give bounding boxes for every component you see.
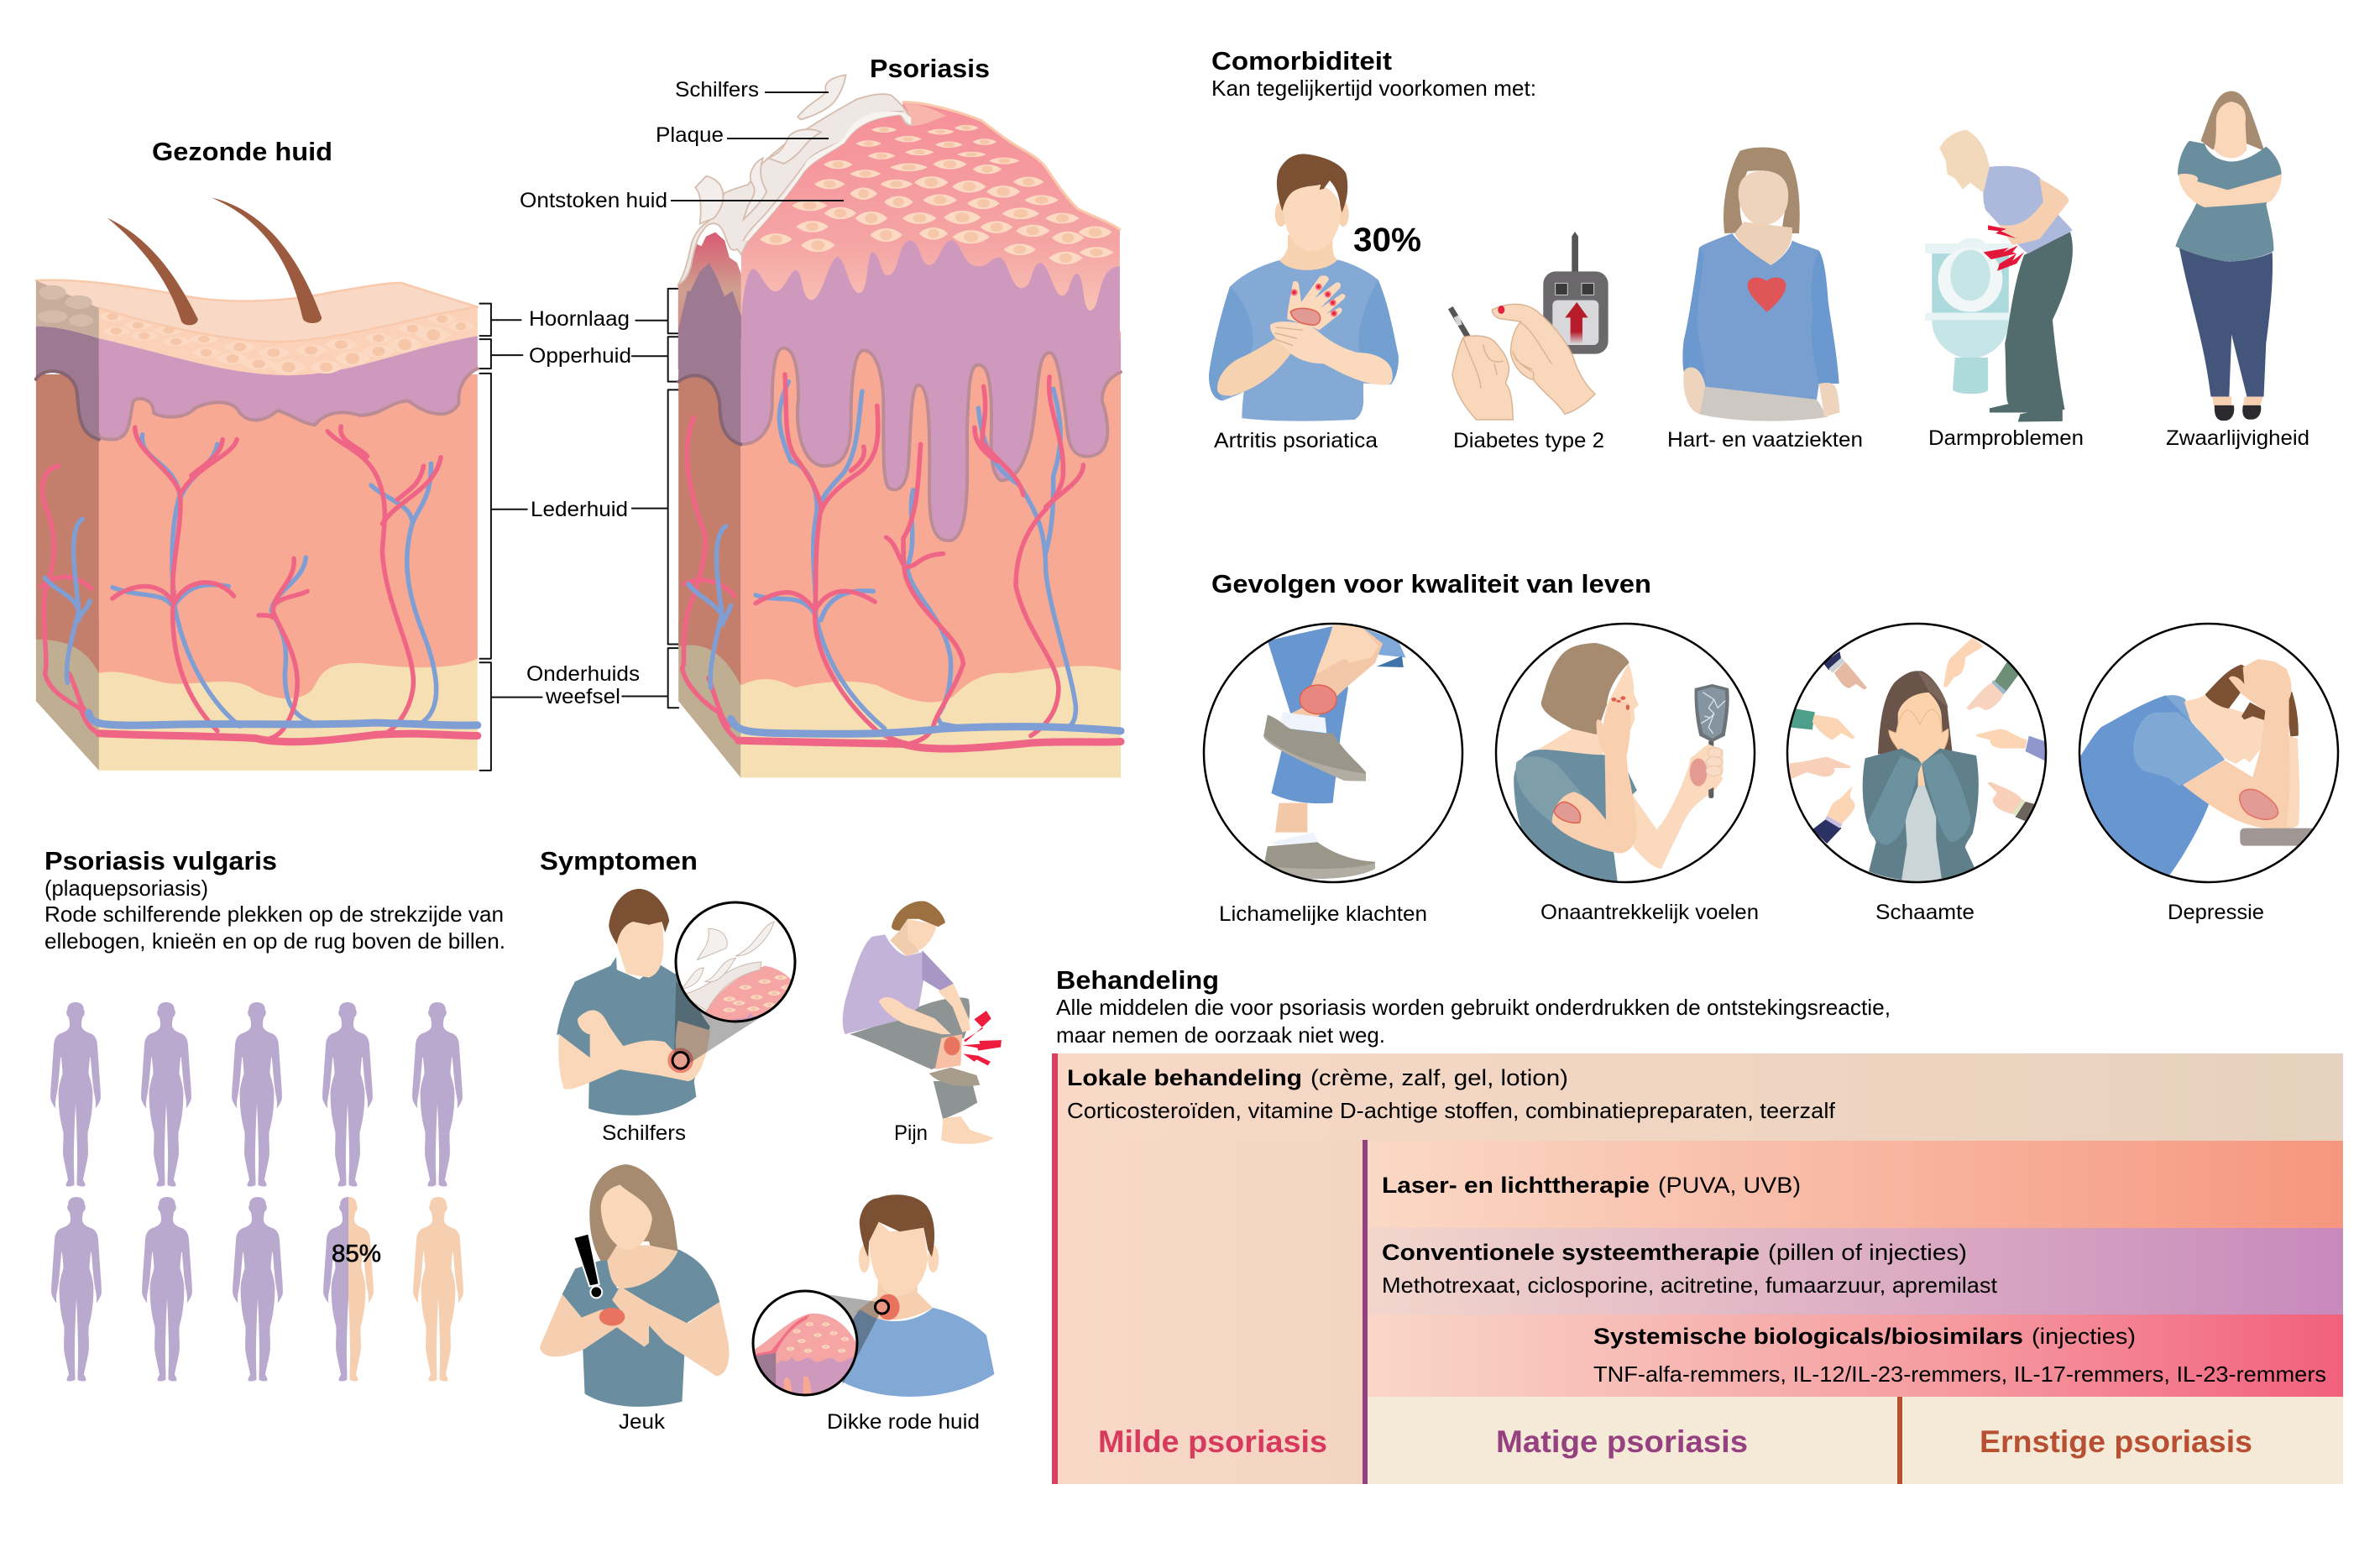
row: Conventionele systeemtherapie xyxy=(1368,1228,2343,1314)
panel: psoriasis skin cross-section xyxy=(520,54,1121,777)
label: weefsel: weefsel xyxy=(545,685,620,708)
severity bar: mild xyxy=(1052,1053,1058,1484)
label: Matige psoriasis: Matige psoriasis xyxy=(1496,1424,1748,1459)
label: Ernstige psoriasis: Ernstige psoriasis xyxy=(1980,1424,2252,1459)
illustration: woman scratching xyxy=(540,1164,730,1434)
panel: Symptomen xyxy=(540,846,1002,1434)
row: Laser- en lichttherapie: (PUVA, UVB) xyxy=(1658,1173,1801,1198)
row: Laser- en lichttherapie xyxy=(1368,1141,2343,1228)
severity band background xyxy=(1368,1397,2343,1484)
label: Ontstoken huid: Ontstoken huid xyxy=(520,189,667,212)
label: Milde psoriasis: Milde psoriasis xyxy=(1098,1424,1327,1459)
label: Pijn xyxy=(894,1121,928,1145)
text block: maar nemen de oorzaak niet weg. xyxy=(1056,1022,1385,1048)
row: Conventionele systeemtherapie: Methotrexaat, ciclosporine, acitretine, fumaarzuur, apremilast xyxy=(1382,1273,1998,1298)
brackets and leader lines xyxy=(480,289,678,771)
heading: Psoriasis: Psoriasis xyxy=(870,54,990,83)
illustration: man with flakes on arm xyxy=(557,889,797,1145)
subtitle: Kan tegelijkertijd voorkomen met: xyxy=(1211,76,1536,101)
label: Artritis psoriatica xyxy=(1214,429,1378,452)
severity bar: moderate xyxy=(1363,1140,1368,1484)
text block: (plaquepsoriasis) xyxy=(44,875,208,901)
text block xyxy=(1056,995,1891,1048)
row: Lokale behandeling: Corticosteroïden, vitamine D-achtige stoffen, combinatiepreparaten, teerzalf xyxy=(1067,1098,1836,1123)
label: Opperhuid: Opperhuid xyxy=(529,344,631,368)
label: Schilfers xyxy=(602,1121,686,1145)
illustration: woman with heart xyxy=(1667,148,1863,452)
row: Lokale behandeling xyxy=(1052,1053,2343,1141)
illustration: man with thick red skin on neck xyxy=(752,1194,994,1434)
row: Conventionele systeemtherapie: Conventionele systeemtherapie xyxy=(1382,1240,1760,1265)
text block: ellebogen, knieën en op de rug boven de billen. xyxy=(44,928,505,954)
severity bar: severe xyxy=(1897,1397,1902,1484)
heading: Comorbiditeit xyxy=(1211,46,1392,76)
illustration: healthy skin block xyxy=(36,197,478,771)
label: Schaamte xyxy=(1875,901,1975,924)
row: Systemische biologicals: Systemische biologicals/biosimilars xyxy=(1593,1324,2023,1349)
illustration: psoriatic skin block xyxy=(678,75,1121,777)
row: Systemische biologicals: TNF-alfa-remmers, IL-12/IL-23-remmers, IL-17-remmers, IL-23-remmers xyxy=(1593,1361,2326,1387)
heading: Symptomen xyxy=(540,846,698,875)
label: Onderhuids: Onderhuids xyxy=(526,662,640,686)
label: Plaque: Plaque xyxy=(656,123,724,147)
row: Systemische biologicals xyxy=(1368,1314,2343,1397)
label: Jeuk xyxy=(619,1410,666,1434)
illustration: diabetes meter xyxy=(1448,232,1608,452)
illustration: overweight woman xyxy=(2166,91,2309,450)
stat: 30%: 30% xyxy=(1353,222,1421,259)
illustration: depression circle xyxy=(2079,624,2338,924)
leader lines xyxy=(671,92,844,201)
panel: layer labels between skin blocks xyxy=(480,289,678,771)
panel: Psoriasis vulgaris xyxy=(44,846,505,1381)
panel: Gevolgen voor kwaliteit van leven xyxy=(1204,569,2338,926)
panel: Comorbiditeit xyxy=(1209,46,2309,452)
label: Hoornlaag: Hoornlaag xyxy=(529,307,630,331)
illustration: person with bowel pain and toilet xyxy=(1925,130,2084,450)
text block: Alle middelen die voor psoriasis worden gebruikt onderdrukken de ontstekingsreactie, xyxy=(1056,995,1891,1020)
row: Conventionele systeemtherapie: (pillen of injecties) xyxy=(1768,1240,1967,1265)
heading: Gezonde huid: Gezonde huid xyxy=(152,137,332,166)
label: Onaantrekkelijk voelen xyxy=(1540,901,1759,924)
label: Depressie xyxy=(2168,901,2264,924)
row: Lokale behandeling: (crème, zalf, gel, lotion) xyxy=(1310,1065,1568,1090)
illustration: artritis psoriatica xyxy=(1209,154,1421,452)
label: 85%: 85% xyxy=(332,1241,381,1267)
text block: Rode schilferende plekken op de strekzijde van xyxy=(44,902,504,927)
label: Darmproblemen xyxy=(1928,426,2084,450)
panel: Behandeling xyxy=(1052,965,2343,1484)
illustration: woman holding painful leg xyxy=(843,902,1002,1145)
row: Systemische biologicals: (injecties) xyxy=(2032,1324,2136,1349)
label: Hart- en vaatziekten xyxy=(1667,428,1863,452)
heading: Behandeling xyxy=(1056,965,1219,995)
label: Dikke rode huid xyxy=(827,1410,980,1434)
panel: healthy skin cross-section xyxy=(36,137,478,771)
label: Lichamelijke klachten xyxy=(1219,902,1427,926)
heading: Gevolgen voor kwaliteit van leven xyxy=(1211,569,1651,598)
magnifier: skin flakes detail xyxy=(676,902,797,1027)
magnifier: thick skin detail xyxy=(752,1291,858,1402)
row: Lokale behandeling: Lokale behandeling xyxy=(1067,1065,1302,1090)
illustration: physical complaints circle xyxy=(1204,624,1462,926)
illustration: feeling unattractive circle xyxy=(1496,624,1759,924)
illustration: shame circle with pointing hands xyxy=(1787,624,2046,924)
label: Zwaarlijvigheid xyxy=(2166,426,2309,450)
text block xyxy=(44,875,505,954)
heading: Psoriasis vulgaris xyxy=(44,846,277,875)
label: Schilfers: Schilfers xyxy=(675,78,759,102)
column: mild background xyxy=(1058,1141,1363,1484)
label: Diabetes type 2 xyxy=(1453,429,1604,452)
label: Lederhuid: Lederhuid xyxy=(531,498,628,521)
row: Laser- en lichttherapie: Laser- en lichttherapie xyxy=(1382,1173,1650,1198)
pictogram: ten human figures, 85% xyxy=(50,1002,463,1381)
